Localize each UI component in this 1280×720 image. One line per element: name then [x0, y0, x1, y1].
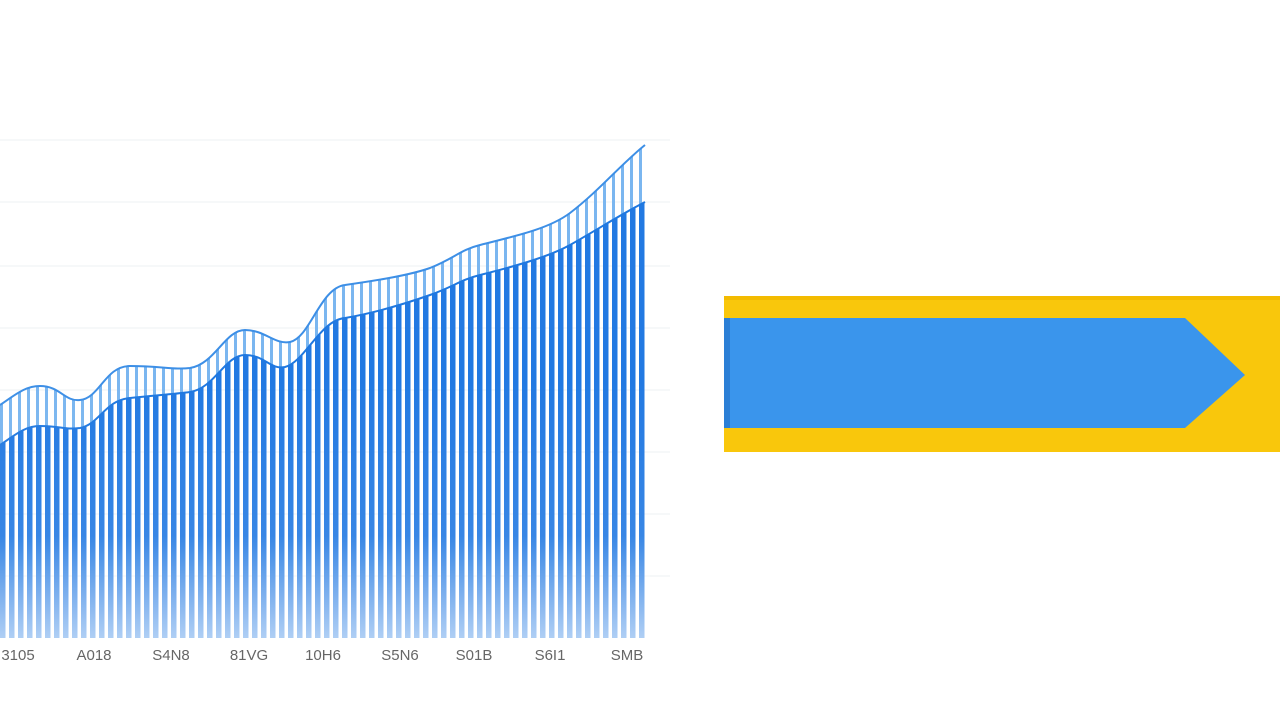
x-axis labels: [1, 647, 643, 664]
x-axis labels: 3105: [1, 647, 35, 664]
x-axis labels: A018: [76, 647, 112, 664]
x-axis labels: S6I1: [535, 647, 565, 664]
x-axis labels: 10H6: [305, 647, 341, 664]
x-axis labels: S4N8: [152, 647, 190, 664]
x-axis labels: 81VG: [230, 647, 268, 664]
arrow banner: [724, 296, 1280, 452]
upper band: [0, 145, 645, 638]
x-axis labels: S01B: [456, 647, 492, 664]
x-axis labels: S5N6: [381, 647, 419, 664]
lower bars: [0, 202, 650, 640]
x-axis labels: SMB: [611, 647, 643, 664]
